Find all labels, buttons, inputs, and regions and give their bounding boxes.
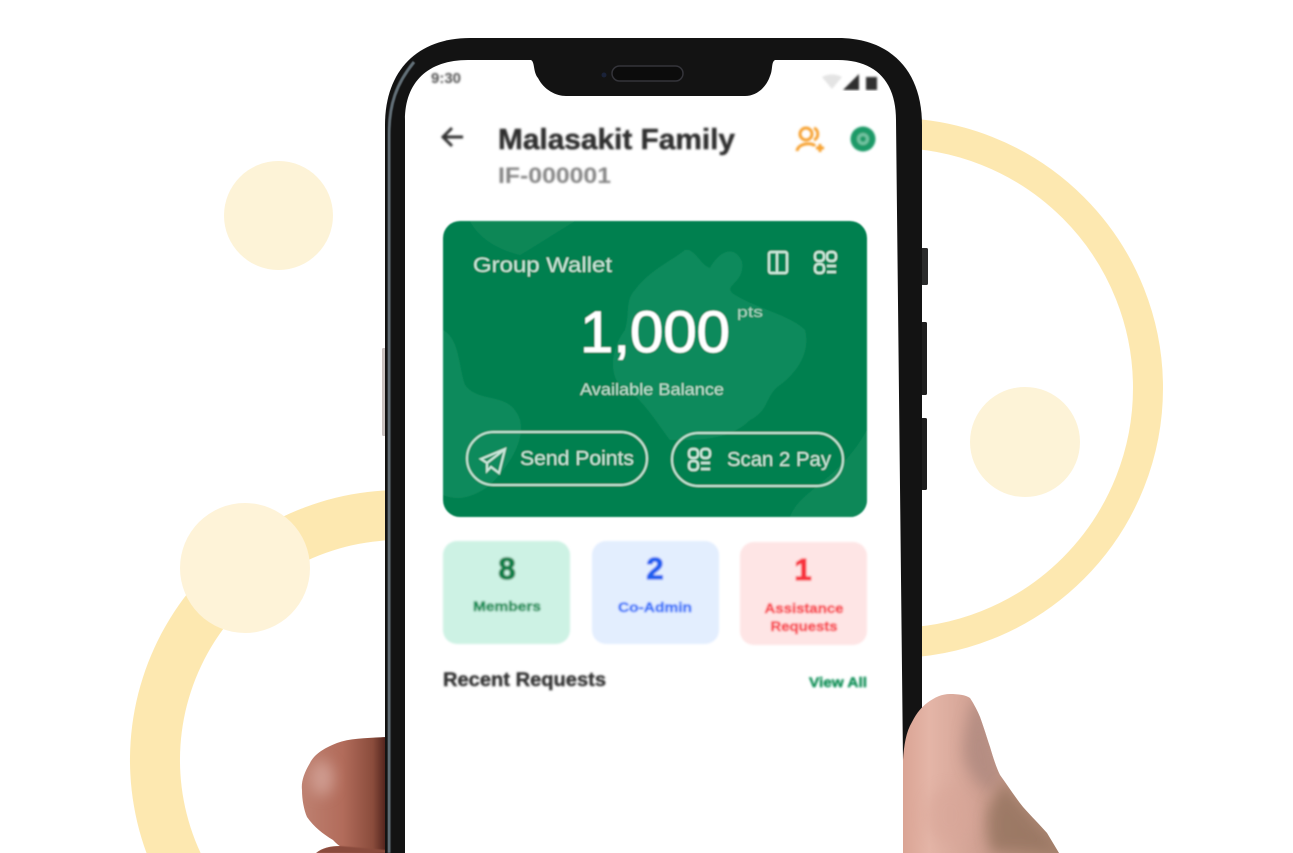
recent requests section [443, 670, 867, 691]
view all link: View All [809, 674, 867, 690]
phone screen [405, 60, 904, 853]
icon: passbook [769, 252, 787, 273]
icon: qr code small [689, 449, 710, 470]
balance label: Available Balance [580, 380, 724, 399]
card: assistance requests: 1 [794, 552, 812, 587]
card: members: Members [473, 598, 541, 614]
icon: right thumb [900, 690, 1062, 853]
group id: IF-000001 [498, 163, 611, 188]
icon: qr code [815, 252, 836, 273]
card: co-admin: 2 [646, 551, 664, 586]
time: 9:30 [431, 70, 461, 87]
phone side buttons [382, 248, 928, 490]
button: send points [467, 432, 647, 485]
card: members: 8 [498, 551, 516, 586]
card: members [443, 541, 570, 644]
icon: paper plane [481, 449, 505, 473]
card: co-admin [592, 541, 719, 644]
card: co-admin: Co-Admin [618, 599, 692, 615]
panel: group wallet [443, 221, 867, 517]
button: scan 2 pay: Scan 2 Pay [727, 449, 831, 471]
icon: left finger [302, 737, 385, 853]
button: send points: Send Points [520, 448, 634, 470]
card: assistance requests: Requests [770, 618, 838, 634]
wallet label: Group Wallet [473, 254, 612, 277]
decorative circle: upper left [224, 161, 333, 270]
decorative circle: lower left [180, 503, 310, 633]
decorative ring: right [638, 133, 1148, 643]
panel: stat cards [443, 541, 867, 645]
balance: 1,000 [580, 300, 730, 365]
decorative ring: lower left [130, 490, 400, 853]
phone speaker [602, 66, 683, 81]
pts: pts [737, 304, 763, 321]
phone body [385, 38, 922, 853]
header [443, 124, 876, 188]
icon: add member [797, 128, 824, 152]
status bar [431, 70, 877, 90]
heading: Recent Requests [443, 670, 606, 691]
decorative circle: right [970, 387, 1080, 497]
icon: settings gear [850, 126, 876, 152]
status icons [822, 74, 877, 90]
card: assistance requests: Assistance [764, 600, 844, 616]
title: Malasakit Family [498, 124, 735, 156]
card: assistance requests [740, 542, 867, 645]
icon: back arrow [443, 128, 463, 146]
wallet map pattern [443, 221, 867, 517]
button: scan 2 pay [672, 433, 843, 486]
